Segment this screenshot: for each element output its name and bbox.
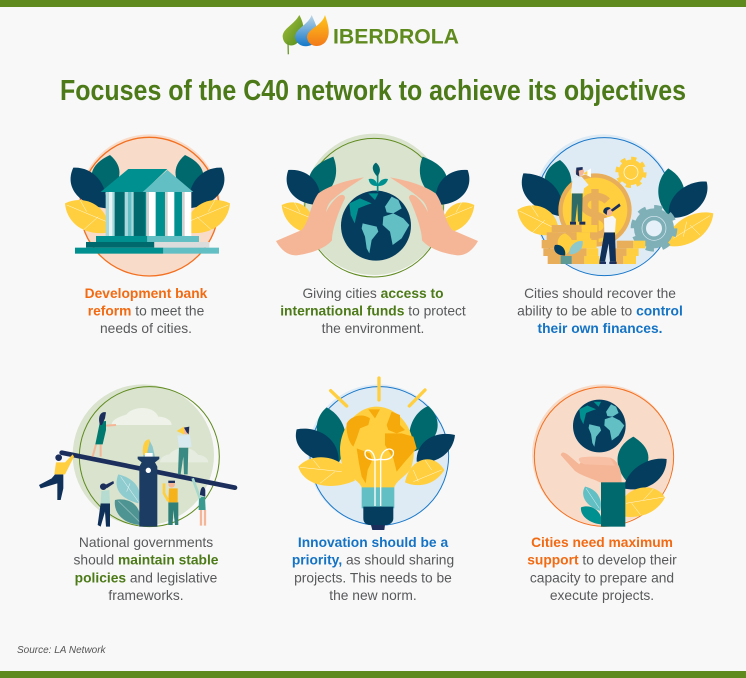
person with megaphone [177,427,192,474]
logo wordmark: IBERDROLA [333,26,459,48]
person pushing [39,454,74,500]
icon: hands protecting globe [276,134,478,277]
text: innovation: priority, as should sharing [292,553,454,568]
person in yellow [164,481,178,525]
top bar [0,0,746,7]
person with binoculars [98,481,114,527]
person with megaphone [570,167,591,225]
bottom bar [0,671,746,678]
icon: hand holding globe [532,384,674,527]
icon: light bulb globe [296,378,455,530]
panel: international funds [276,134,478,336]
person with binoculars [599,203,621,264]
text: development bank: Development bank [85,286,208,301]
text: innovation: projects. This needs to be [294,570,452,585]
text: development bank: reform to meet the [88,304,204,318]
text: stable policies: should maintain stable [74,553,218,568]
text: maximum support: capacity to prepare and [530,570,674,585]
text: innovation: Innovation should be a [298,535,448,550]
panel: development bank reform [65,134,230,336]
text: maximum support: support to develop their [527,553,677,568]
woman pushing [193,478,206,526]
text: maximum support: execute projects. [550,588,654,603]
panel: stable policies [39,384,235,603]
icon: coins and gears [517,134,713,276]
text: control finances: Cities should recover the [524,286,676,301]
logo: Iberdrola [283,15,459,54]
icon: bank [65,134,230,276]
text: control finances: ability to be able to control [517,304,683,318]
text: development bank: needs of cities. [100,321,192,336]
icon: seesaw with people [39,384,235,527]
source note: Source: LA Network [17,645,107,656]
text: maximum support: Cities need maximum [531,535,673,550]
woman on beam [93,412,116,457]
text: stable policies: policies and legislative [75,570,217,585]
seated person [143,439,155,458]
panel: innovation [292,378,455,603]
text: innovation: the new norm. [329,588,417,603]
text: international funds: Giving cities access to [302,286,444,301]
panel: control finances [517,134,713,336]
icon: leaf and drops [283,15,329,54]
text: stable policies: National governments [79,535,213,550]
panel: maximum support [527,384,677,603]
text: international funds: international funds to protect [280,304,466,318]
text: stable policies: frameworks. [108,588,184,603]
text: international funds: the environment. [322,321,424,336]
text: control finances: their own finances. [538,321,662,336]
